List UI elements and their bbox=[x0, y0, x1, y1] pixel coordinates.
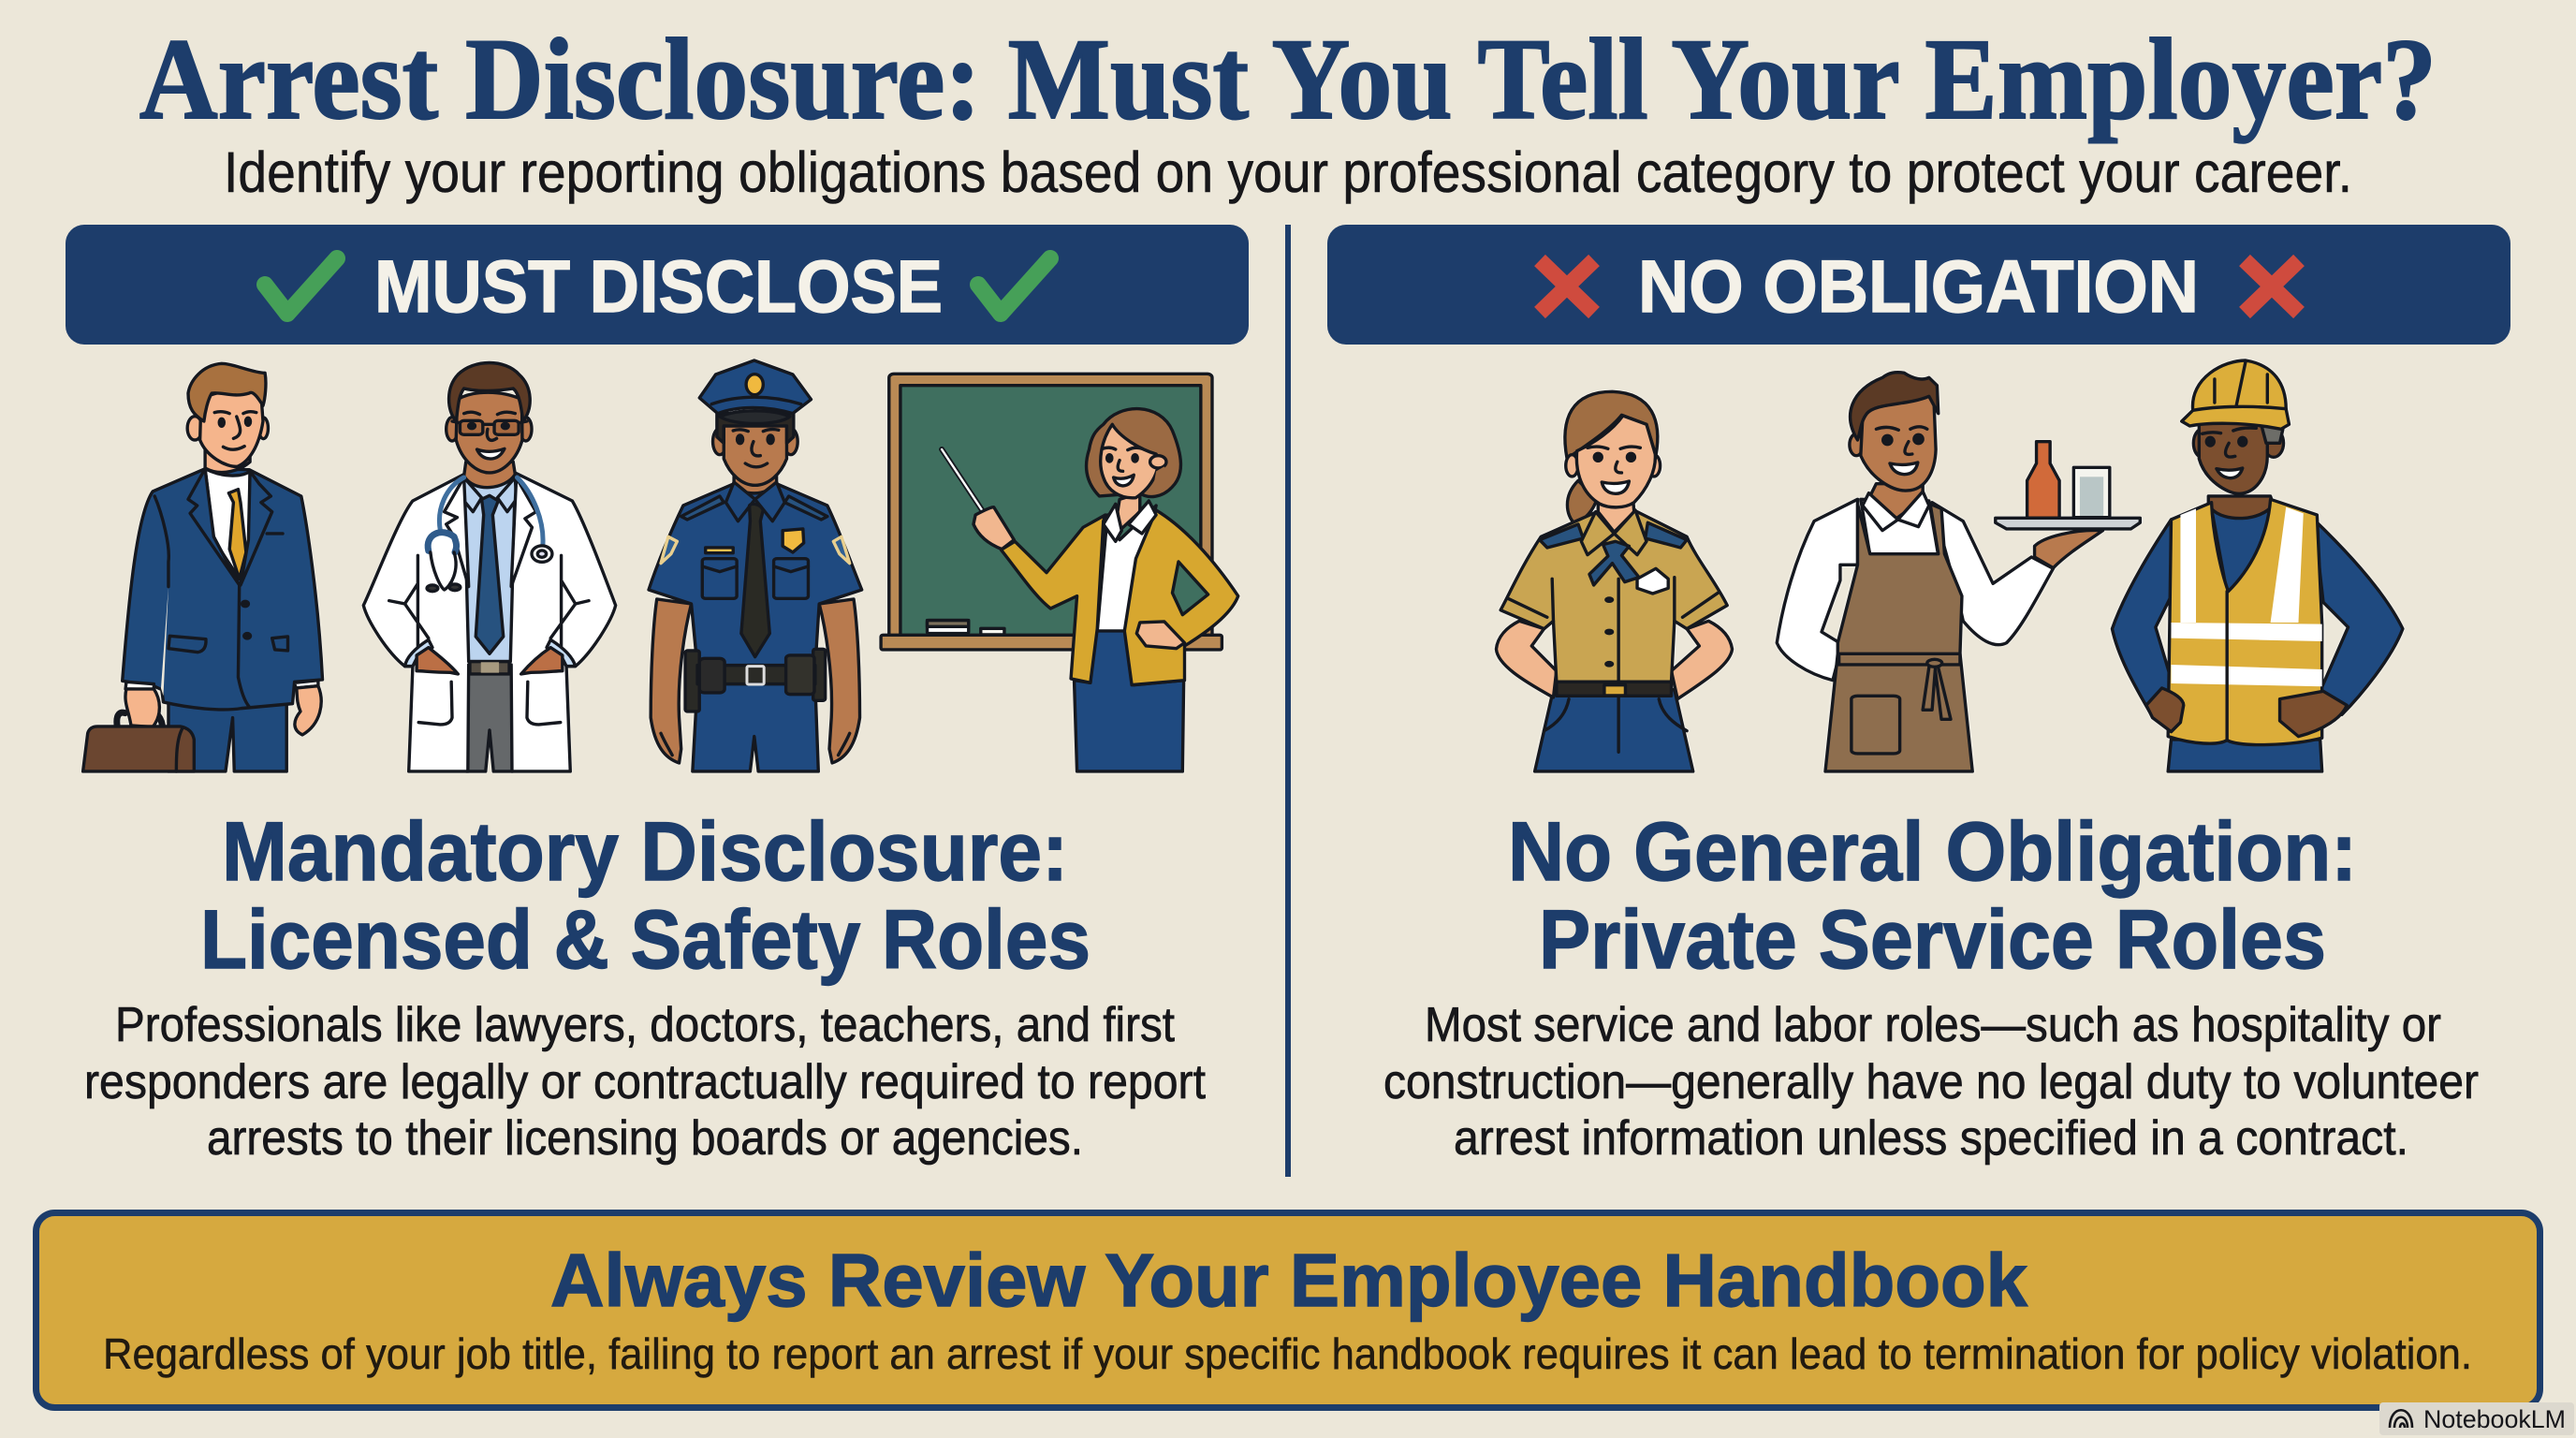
illustration: doctor bbox=[363, 362, 616, 771]
body: no general obligation bbox=[1383, 998, 2479, 1166]
body: mandatory disclosure: Professionals like lawyers, doctors, teachers, and first bbox=[115, 998, 1175, 1052]
illustration: lawyer bbox=[83, 363, 323, 771]
body: no general obligation: construction—generally have no legal duty to volunteer bbox=[1383, 1055, 2479, 1109]
heading: no general obligation: No General Obligation: bbox=[1508, 804, 2357, 898]
icon: green check right bbox=[978, 258, 1050, 314]
chalkboard bbox=[881, 374, 1222, 650]
illustration: construction worker bbox=[2112, 360, 2403, 771]
heading: no obligation: NO OBLIGATION bbox=[1638, 244, 2199, 328]
text block: no general obligation bbox=[1383, 804, 2479, 1166]
callout text: Regardless of your job title, failing to report an arrest if your specific handbook requires it can lead to termination for policy violation. bbox=[103, 1329, 2472, 1378]
icon: red x right bbox=[2245, 260, 2299, 313]
icon: green check left bbox=[265, 258, 337, 314]
illustration: police officer bbox=[649, 360, 862, 771]
body: mandatory disclosure: responders are legally or contractually required to report bbox=[84, 1055, 1206, 1109]
illustration: waiter with tray bbox=[1777, 373, 2140, 771]
heading: must disclose: MUST DISCLOSE bbox=[374, 244, 943, 328]
watermark: NotebookLM: NotebookLM bbox=[2423, 1405, 2566, 1433]
heading: no general obligation: Private Service Roles bbox=[1539, 892, 2326, 986]
panel: must disclose header bbox=[66, 225, 1249, 345]
panel: no obligation header bbox=[1327, 225, 2510, 345]
illustration: teacher at chalkboard bbox=[881, 374, 1238, 771]
callout: employee handbook bbox=[36, 1213, 2540, 1408]
title: Arrest Disclosure: Must You Tell Your Employer? bbox=[139, 15, 2437, 143]
heading: no general obligation bbox=[1508, 804, 2357, 986]
heading: mandatory disclosure: Licensed & Safety Roles bbox=[200, 892, 1090, 986]
pointer bbox=[942, 449, 988, 519]
watermark: NotebookLM bbox=[2379, 1402, 2574, 1435]
body: mandatory disclosure bbox=[84, 998, 1206, 1166]
text block: mandatory disclosure bbox=[84, 804, 1206, 1166]
illustration: hospitality worker bbox=[1496, 391, 1733, 771]
body: no general obligation: arrest information unless specified in a contract. bbox=[1454, 1111, 2408, 1166]
heading: mandatory disclosure bbox=[200, 804, 1090, 986]
body: no general obligation: Most service and labor roles—such as hospitality or bbox=[1425, 998, 2441, 1052]
icon: notebooklm logo bbox=[2390, 1410, 2412, 1428]
callout heading: Always Review Your Employee Handbook bbox=[550, 1239, 2027, 1322]
body: mandatory disclosure: arrests to their licensing boards or agencies. bbox=[207, 1111, 1083, 1166]
heading: mandatory disclosure: Mandatory Disclosure: bbox=[222, 804, 1068, 898]
icon: red x left bbox=[1540, 260, 1594, 313]
subtitle: Identify your reporting obligations based on your professional category to protect your career. bbox=[224, 140, 2352, 204]
